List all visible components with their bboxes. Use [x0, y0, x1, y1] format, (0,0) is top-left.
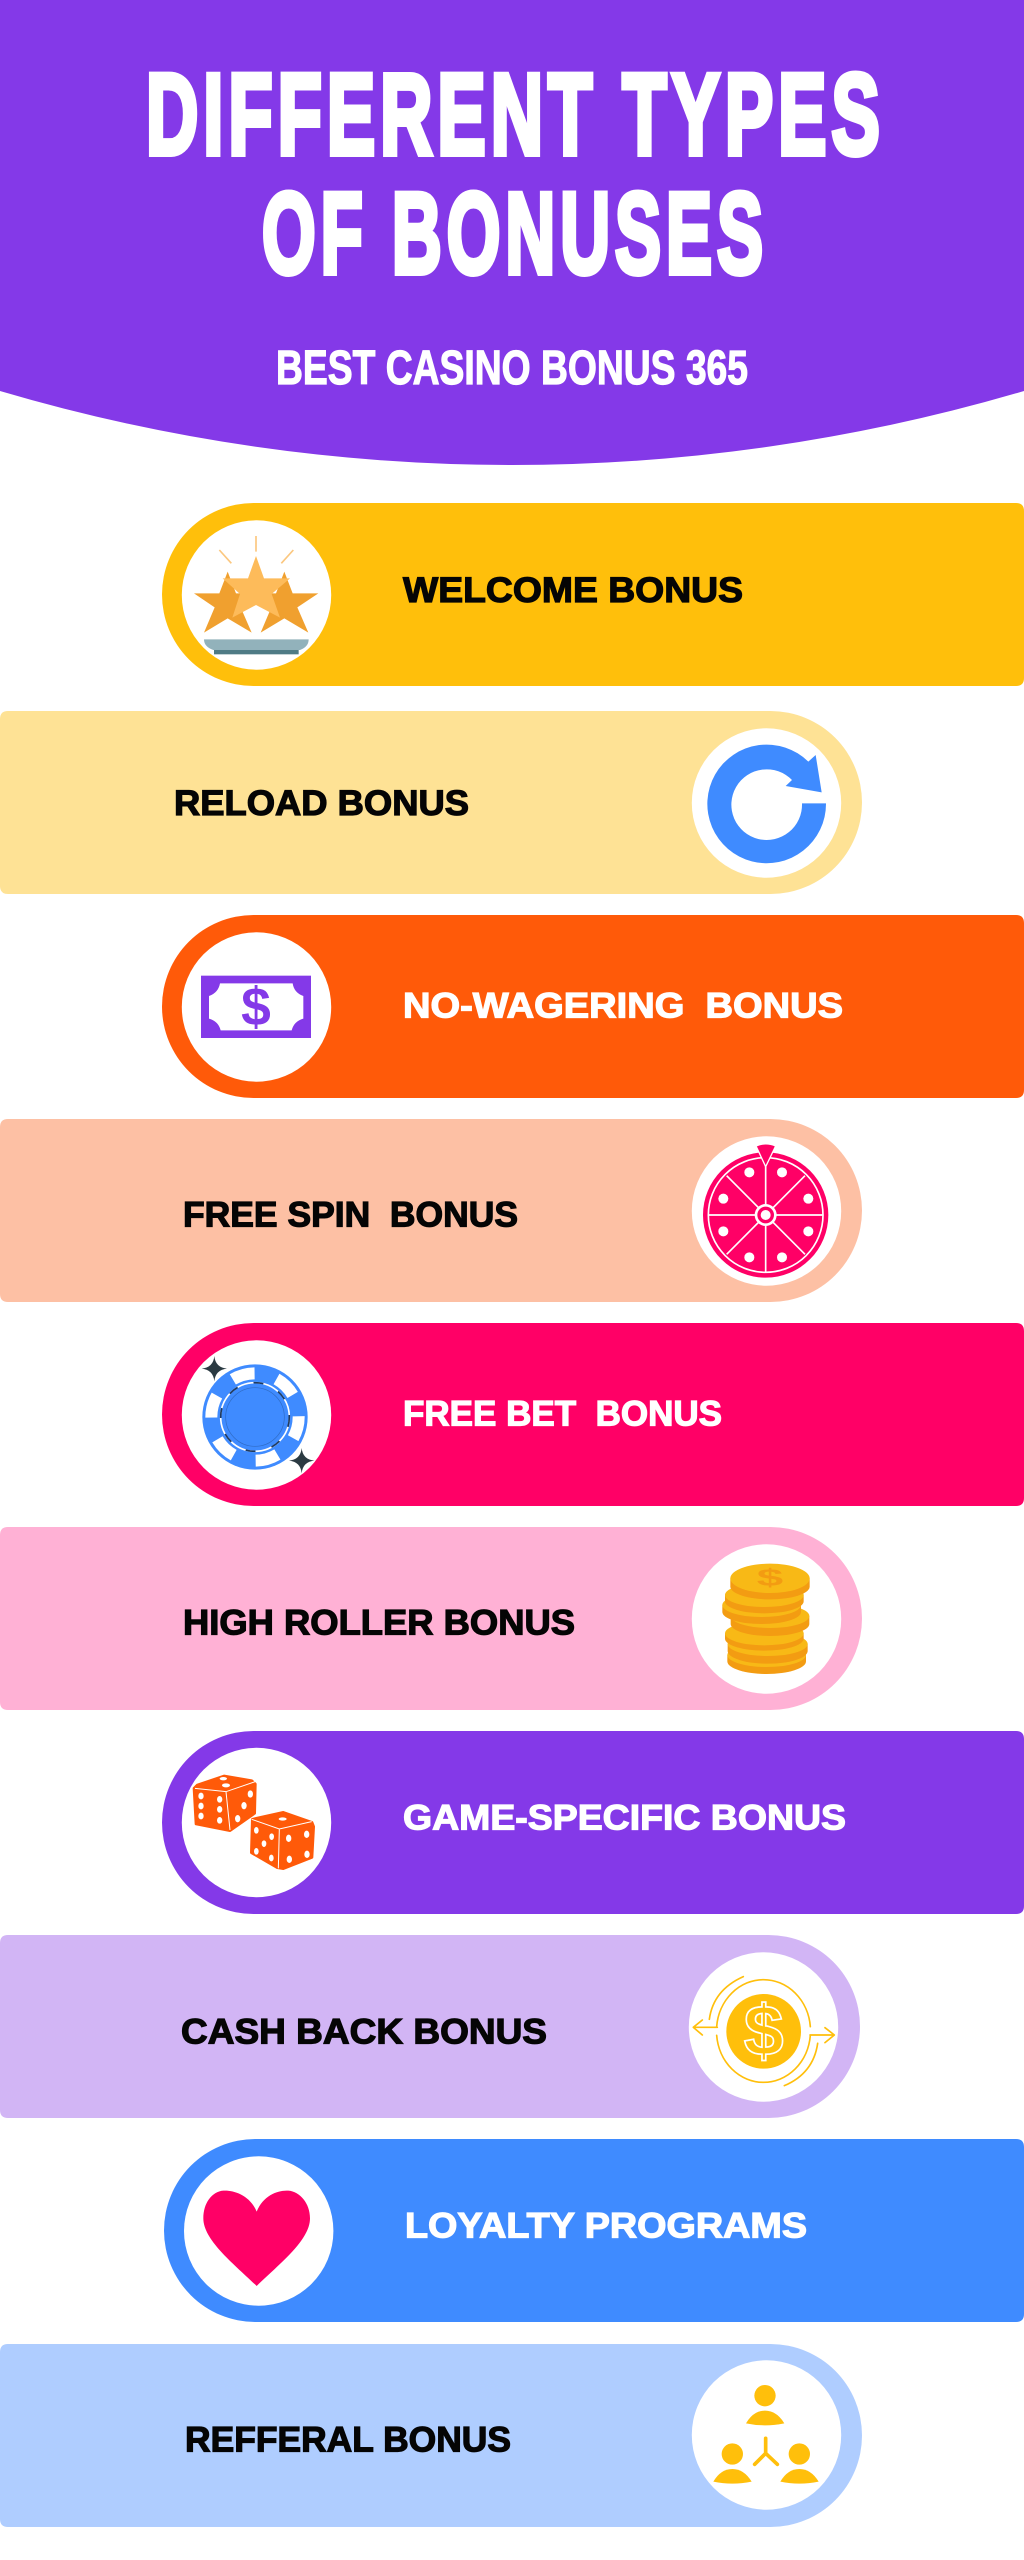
- label: NO-WAGERING BONUS: [403, 986, 843, 1026]
- icon badge: [689, 1952, 838, 2102]
- bar: [0, 2344, 862, 2527]
- icon: banknote: $: [241, 978, 271, 1037]
- icon badge: [182, 1748, 331, 1897]
- label: HIGH ROLLER BONUS: [183, 1604, 575, 1642]
- panel: reload bonus: [0, 711, 862, 894]
- icon badge: [182, 932, 331, 1082]
- panel: game-specific bonus: [162, 1731, 1024, 1914]
- title: [146, 51, 885, 298]
- header banner: [0, 0, 1024, 465]
- bar: [0, 711, 862, 894]
- label: LOYALTY PROGRAMS: [405, 2206, 807, 2246]
- icon: dollar with circular arrows: $: [744, 1991, 784, 2071]
- panel: welcome bonus: [162, 503, 1024, 686]
- icon: heart: [203, 2191, 310, 2286]
- label: RELOAD BONUS: [174, 784, 469, 823]
- icon badge: [692, 1136, 841, 1286]
- label: CASH BACK BONUS: [181, 2012, 547, 2052]
- label: WELCOME BONUS: [403, 571, 743, 610]
- panel: high roller bonus: [0, 1527, 862, 1710]
- bar: [0, 1119, 862, 1302]
- icon: prize wheel: [703, 1144, 828, 1278]
- bar: [162, 915, 1024, 1098]
- panel: no-wagering bonus: [162, 915, 1024, 1098]
- bar: [162, 1731, 1024, 1914]
- bar: [0, 1935, 860, 2118]
- icon: dice: [194, 1776, 314, 1869]
- label: REFFERAL BONUS: [185, 2420, 511, 2460]
- icon: referral people: [713, 2385, 819, 2484]
- icon: dollar with circular arrows: [693, 1977, 834, 2086]
- icon badge: [182, 1340, 331, 1490]
- title: OF BONUSES: [262, 170, 768, 298]
- panel: free spin bonus: [0, 1119, 862, 1302]
- bar: [162, 503, 1024, 686]
- panel: referral bonus: [0, 2344, 862, 2527]
- icon badge: [692, 2360, 841, 2510]
- icon badge: [184, 2156, 333, 2306]
- icon: coin stack: [722, 1564, 810, 1674]
- panel: free bet bonus: [162, 1323, 1024, 1506]
- panel: loyalty programs: [164, 2139, 1024, 2322]
- icon: stars on plate: [194, 536, 318, 654]
- label: FREE BET BONUS: [403, 1394, 722, 1434]
- bar: [162, 1323, 1024, 1506]
- icon badge: [182, 520, 331, 670]
- icon badge: [692, 1544, 841, 1694]
- icon: banknote: [201, 976, 311, 1038]
- panel: cash back bonus: [0, 1935, 860, 2118]
- bar: [164, 2139, 1024, 2322]
- icon: reload arrow: [707, 745, 826, 863]
- icon badge: [692, 728, 841, 878]
- subtitle: BEST CASINO BONUS 365: [276, 342, 748, 395]
- bar: [0, 1527, 862, 1710]
- header background arc: [0, 0, 1024, 465]
- label: FREE SPIN BONUS: [183, 1196, 518, 1234]
- icon: coin stack: $: [757, 1564, 783, 1591]
- title: DIFFERENT TYPES: [146, 51, 885, 179]
- label: GAME-SPECIFIC BONUS: [403, 1798, 846, 1838]
- icon: casino chip: [202, 1356, 314, 1473]
